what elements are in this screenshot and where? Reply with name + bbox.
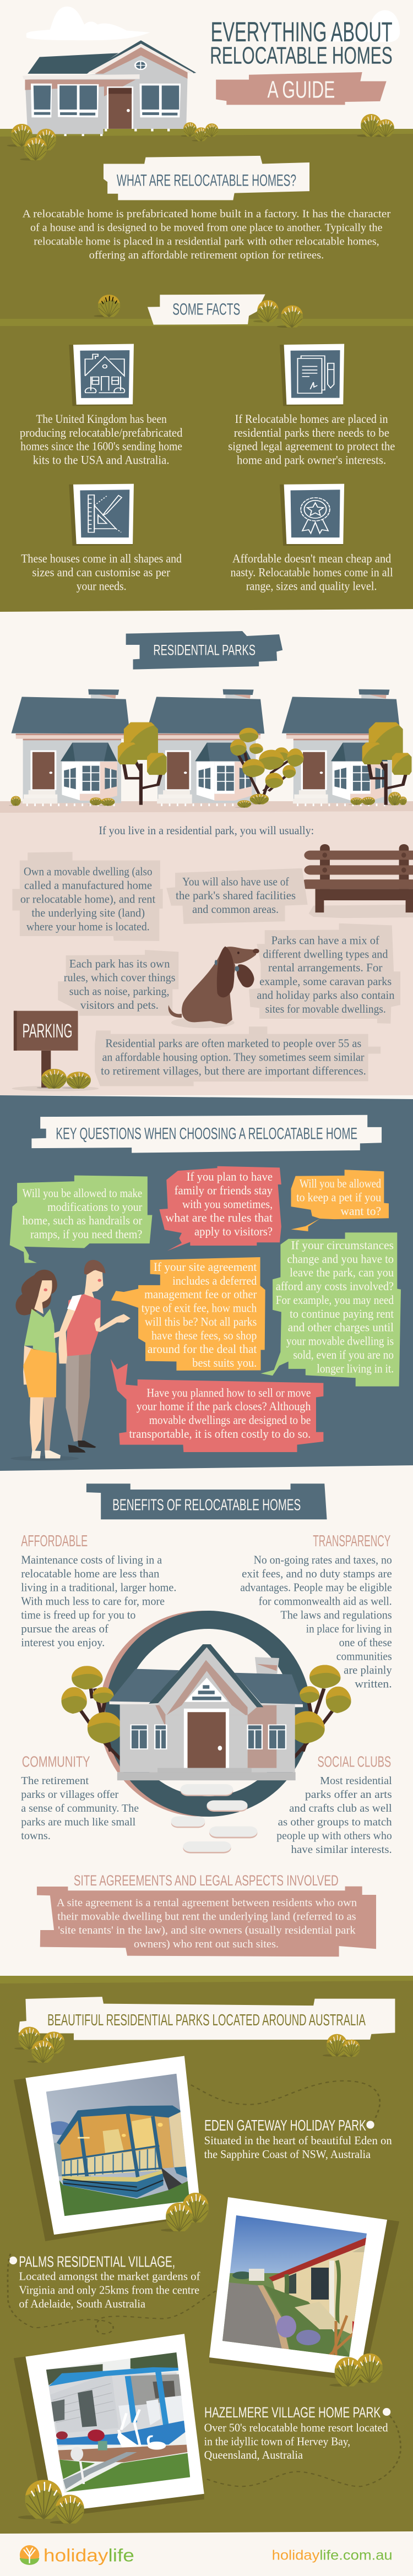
bubble: pet: to keep a pet if you — [296, 1191, 381, 1204]
text block: shared facilities: You will also have use of — [182, 875, 289, 888]
title — [210, 17, 393, 69]
bubble: site agreement fees: type of exit fee, how much — [142, 1302, 257, 1315]
benefit: affordable: relocatable home are less than — [21, 1567, 160, 1580]
bushes — [14, 2027, 360, 2063]
bubble: park closes: Have you planned how to sell or move — [146, 1387, 311, 1400]
dashed route to Eden Gateway — [191, 2081, 380, 2121]
bubble: site agreement fees: around for the deal that — [148, 1343, 257, 1356]
Hazelmere Village text — [204, 2404, 390, 2461]
benefit: affordable: living in a traditional, larger home. — [21, 1581, 176, 1594]
benefit: community: parks are much like small — [21, 1816, 135, 1828]
benefit: affordable: AFFORDABLE — [21, 1532, 88, 1550]
card: house icon — [69, 344, 134, 406]
key questions section — [10, 1115, 401, 1461]
text block: own a movable dwelling: called a manufactured home — [24, 879, 152, 892]
heading: what are relocatable homes — [104, 156, 309, 200]
Palms Residential Village text: Virginia and only 25kms from the centre — [19, 2284, 199, 2297]
parks section — [9, 1997, 395, 2311]
benefit: affordable: interest you enjoy. — [21, 1636, 105, 1649]
man — [58, 1260, 131, 1453]
benefit: community: a sense of community. The — [21, 1802, 139, 1814]
photo card: Eden Gateway — [14, 2056, 202, 2241]
bubble: visitors: family or friends stay — [175, 1184, 273, 1197]
bushes beside heading — [253, 300, 303, 328]
text block: park rules: such as noise, parking, — [69, 985, 170, 998]
text block: shared facilities: the park's shared facilities — [176, 889, 296, 902]
Palms Residential Village text: Located amongst the market gardens of — [19, 2270, 200, 2283]
panel: site agreement text — [37, 1887, 376, 1957]
parking sign: PARKING — [23, 1020, 73, 1041]
stepping stones — [171, 1784, 257, 1854]
heading: some facts: SOME FACTS — [172, 301, 240, 319]
Eden Gateway text — [204, 2117, 392, 2161]
bubble: park closes: your home if the park closes? Although — [137, 1400, 311, 1414]
benefit: community: COMMUNITY — [22, 1753, 90, 1770]
tree right — [362, 722, 412, 805]
banner: a guide: A GUIDE — [267, 76, 335, 103]
cloud right — [327, 10, 400, 42]
fact texts: These houses come in all shapes and — [21, 552, 182, 566]
benefit: affordable — [21, 1532, 176, 1649]
panel: site agreement text: owners) who rent out such sites. — [134, 1938, 279, 1950]
dashed route to Hazelmere — [204, 2416, 400, 2486]
website address: holidaylife.com.au — [272, 2547, 393, 2563]
bubble: modifications: modifications to your — [47, 1200, 143, 1214]
bubble: modifications — [10, 1176, 152, 1263]
benefit: community: towns. — [21, 1830, 51, 1842]
hero house — [23, 40, 196, 136]
card: ruler and pencil icon — [69, 484, 134, 546]
bubble: park closes — [111, 1359, 323, 1452]
benefit: affordable: pursue the areas of — [21, 1622, 109, 1635]
bubble: site agreement fees: includes a deferred — [172, 1274, 257, 1287]
Palms Residential Village text: of Adelaide, South Australia — [19, 2298, 145, 2311]
text block: park rules: rules, which cover things — [64, 971, 176, 984]
benefit: community — [21, 1753, 139, 1842]
bubble: park closes: transportable, it is often costly to do so. — [129, 1427, 311, 1441]
bushes — [7, 114, 394, 160]
bubble: pet: want to? — [340, 1205, 381, 1218]
bubble: modifications: Will you be allowed to make — [23, 1187, 142, 1200]
ring behind benefits house — [99, 1611, 311, 1817]
text block: own a movable dwelling — [12, 852, 163, 941]
fact texts: The United Kingdom has been — [36, 412, 167, 426]
dog — [169, 947, 259, 1028]
text block: own a movable dwelling: the underlying site (land) — [31, 906, 145, 919]
fact texts: producing relocatable/prefabricated — [20, 426, 183, 439]
logo: holidaylife: holidaylife — [44, 2546, 134, 2566]
bubble: circumstances — [261, 1232, 401, 1387]
benefit: transparency — [240, 1532, 392, 1691]
fact texts: your needs. — [77, 580, 127, 593]
card: document icon — [280, 344, 344, 406]
benefit: social clubs — [276, 1753, 392, 1856]
trees around house — [61, 1665, 351, 1765]
fact texts — [20, 412, 395, 593]
bubble: site agreement fees: If your site agreement — [154, 1260, 257, 1274]
benefit: community: The retirement — [21, 1775, 89, 1787]
bubble: site agreement fees: management fee or other — [144, 1288, 257, 1301]
Hazelmere Village text: Queensland, Australia — [204, 2448, 303, 2461]
parking sign — [12, 1011, 99, 1091]
woman — [15, 1270, 66, 1458]
heading: key questions — [31, 1115, 382, 1153]
bubble: site agreement fees: will this be? Not all parks — [145, 1316, 257, 1329]
bubble: pet — [291, 1170, 389, 1231]
bubble: visitors: what are the rules that — [165, 1211, 273, 1225]
Palms Residential Village text — [9, 2253, 200, 2311]
dashed route from Palms — [8, 2254, 216, 2334]
text block: dwelling types — [249, 923, 400, 1024]
fact texts: kits to the USA and Australia. — [33, 454, 170, 467]
bushes — [9, 792, 407, 808]
banner: a guide — [216, 72, 387, 105]
text block: shared facilities — [166, 868, 308, 924]
bubble: modifications: home, such as handrails or — [23, 1214, 143, 1227]
photo card: Hazelmere Village — [14, 2334, 204, 2515]
bubble: modifications: ramps, if you need them? — [30, 1228, 142, 1241]
text block: park rules — [58, 950, 178, 1016]
text block: own a movable dwelling: Own a movable dwelling (also — [24, 865, 152, 878]
some facts section — [20, 295, 395, 593]
fact texts: sizes and can customise as per — [32, 566, 170, 579]
bubble: visitors: If you plan to have — [187, 1171, 273, 1183]
intro paragraph — [23, 208, 390, 262]
bushes behind heading — [94, 295, 120, 317]
residential parks section — [9, 631, 412, 837]
photo card bushes — [161, 2193, 209, 2232]
photo card: Palms Residential Village — [209, 2197, 399, 2382]
bubble: visitors — [159, 1166, 281, 1251]
bubble: site agreement fees: best suits you. — [192, 1356, 257, 1369]
bubble: visitors: apply to visitors? — [194, 1225, 273, 1238]
cloud left — [26, 7, 150, 40]
benefit: transparency: are plainly — [344, 1664, 392, 1677]
tree left — [118, 722, 167, 805]
card: award icon — [280, 484, 344, 546]
fact texts: homes since the 1600's sending home — [20, 440, 182, 453]
text block: park rules: visitors and pets. — [80, 998, 159, 1012]
benefits house — [109, 1644, 303, 1780]
hero section — [7, 7, 400, 262]
intro paragraph: offering an affordable retirement option for retirees. — [89, 249, 324, 262]
benefits section — [21, 1483, 392, 1780]
benefit: transparency: written. — [355, 1677, 392, 1691]
heading: some facts — [148, 295, 265, 325]
tree middle — [230, 728, 303, 800]
heading: benefits — [86, 1483, 327, 1519]
heading: residential parks: RESIDENTIAL PARKS — [153, 642, 256, 659]
Palms Residential Village text: PALMS RESIDENTIAL VILLAGE, — [19, 2253, 175, 2270]
heading: beautiful parks — [18, 1997, 395, 2040]
benefit: affordable: With much less to care for, more — [21, 1595, 165, 1608]
bubble: site agreement fees — [111, 1257, 265, 1371]
text block: shared facilities: and common areas. — [192, 903, 279, 916]
house row — [12, 689, 400, 805]
bubble: park closes: movable dwellings are designed to be — [149, 1414, 311, 1427]
benefit: affordable: time is freed up for you to — [21, 1608, 135, 1622]
text block: park rules: Each park has its own — [69, 957, 170, 970]
text block: own a movable dwelling: or relocatable home), and rent — [20, 893, 155, 905]
heading: residential parks — [126, 631, 282, 670]
bench — [300, 844, 413, 918]
photo card bushes — [18, 2354, 383, 2524]
benefit: community: parks or villages offer — [21, 1789, 119, 1801]
benefit: affordable: Maintenance costs of living in a — [21, 1553, 162, 1567]
text block: own a movable dwelling: where your home is located. — [26, 920, 150, 933]
bubble: site agreement fees: have these fees, so shop — [151, 1329, 257, 1343]
text block: marketed to over 55 — [95, 1026, 381, 1086]
bubble: visitors: with you sometimes, — [182, 1198, 273, 1211]
couple illustration — [10, 1260, 131, 1461]
